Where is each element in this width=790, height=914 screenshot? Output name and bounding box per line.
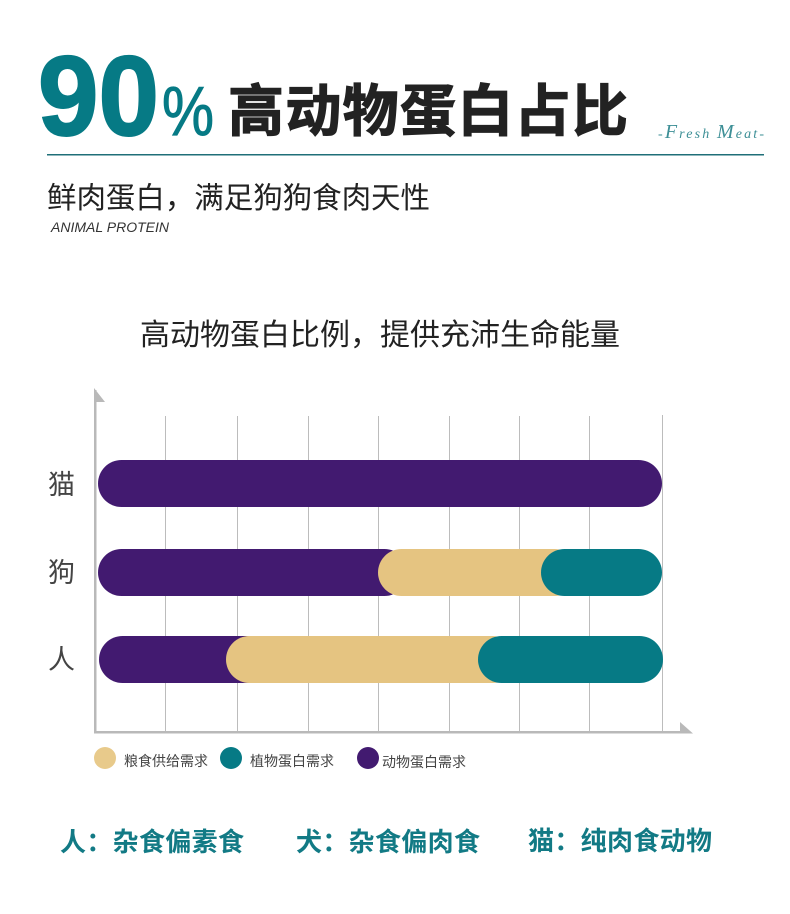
bar: dog plant protein [541, 549, 662, 596]
legend [94, 747, 466, 770]
bar chart [48, 388, 693, 734]
legend: animal protein [357, 747, 466, 770]
legend: plant protein [220, 747, 334, 769]
legend: plant protein: 植物蛋白需求 [250, 753, 334, 769]
bar: human grain [226, 636, 516, 683]
row: human [48, 636, 663, 683]
summary: cat: 猫：纯肉食动物 [528, 826, 712, 856]
bar: dog grain [378, 549, 578, 596]
diet summary [60, 826, 712, 857]
main heading: 高动物蛋白占比 [228, 80, 628, 143]
bar: human animal protein [99, 636, 269, 683]
bar: dog animal protein [98, 549, 408, 596]
summary: dog: 犬：杂食偏肉食 [296, 827, 480, 857]
summary: human: 人：杂食偏素食 [60, 827, 244, 857]
axes with arrowheads [94, 388, 693, 734]
chart title: 高动物蛋白比例，提供充沛生命能量 [140, 319, 620, 352]
subheading: 鲜肉蛋白，满足狗狗食肉天性 [47, 182, 430, 215]
english caption: ANIMAL PROTEIN [50, 219, 170, 235]
row: cat [48, 460, 662, 507]
label: human: 人 [48, 645, 75, 675]
tagline: Fresh Meat: -Fresh Meat- [658, 121, 764, 143]
row: dog [48, 549, 662, 596]
label: dog: 狗 [48, 558, 75, 588]
grid lines [166, 415, 662, 732]
percent sign: % [162, 72, 214, 150]
bar: human plant protein [478, 636, 663, 683]
label: cat: 猫 [48, 470, 75, 500]
legend: animal protein: 动物蛋白需求 [382, 754, 466, 770]
header: 90% title [38, 33, 764, 159]
legend: grain: 粮食供给需求 [124, 753, 208, 769]
legend: grain [94, 747, 208, 769]
big number 90: 90 [38, 33, 159, 159]
bar: cat animal protein [98, 460, 662, 507]
header rule [47, 154, 764, 156]
